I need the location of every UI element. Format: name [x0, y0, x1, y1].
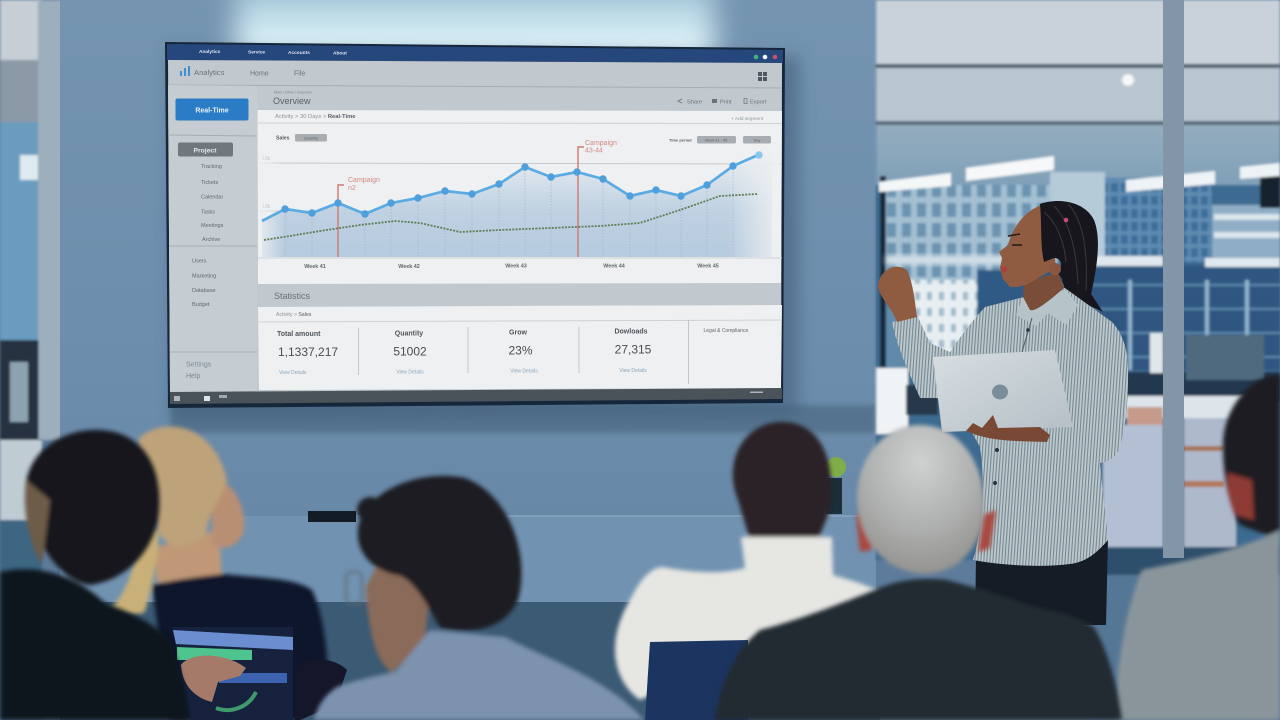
grow: Grow	[509, 330, 527, 336]
sidebar secondary menu	[192, 258, 216, 308]
nav tabs: Service	[248, 50, 265, 56]
shaded wall below the screen	[170, 405, 876, 433]
bezel	[165, 42, 785, 408]
breadcrumb and overview heading: Main / Other / Overview	[274, 90, 312, 94]
time period filter: Time period	[669, 138, 692, 142]
background: left office window	[0, 0, 42, 720]
quantity: 51002	[393, 344, 427, 358]
settings and help: Settings	[186, 362, 212, 368]
window dots	[754, 55, 777, 59]
sidebar project menu: Tasks	[201, 210, 215, 216]
sales filter: Quantity	[304, 136, 318, 140]
week labels: Week 44	[603, 264, 625, 270]
app body	[168, 60, 782, 393]
area chart: 15k	[262, 156, 271, 162]
campaign 43-44 marker: Campaign	[585, 140, 617, 147]
total amount: View Details	[279, 370, 307, 376]
home link: Home	[250, 70, 269, 78]
chair back	[645, 640, 748, 720]
audience: laptop with dashboard	[172, 627, 293, 720]
audience: grey haired man in dark suit	[714, 425, 1122, 720]
quantity: Quantity	[395, 330, 423, 338]
week labels: Week 42	[398, 264, 420, 270]
chart panel	[258, 110, 782, 284]
quantity: View Details	[396, 370, 424, 376]
analytics logo: Analytics	[194, 68, 225, 77]
office desks	[876, 333, 1280, 720]
breadcrumb row: Activity > 30 Days > Real-Time	[275, 114, 356, 120]
glass partition frame	[1163, 0, 1184, 558]
campaign n2 marker: n2	[348, 185, 356, 192]
time period filter	[669, 136, 771, 144]
breadcrumb and overview heading	[273, 90, 312, 106]
hands under laptop	[966, 415, 1050, 442]
settings and help: Help	[186, 373, 201, 380]
grow: 23%	[508, 344, 533, 358]
wall column	[38, 0, 62, 440]
campaign n2 marker	[338, 177, 380, 257]
dividers	[358, 320, 688, 384]
hair bead	[1064, 218, 1068, 222]
nav tabs: Analytics	[199, 49, 221, 55]
background: right office with city view	[876, 0, 1280, 720]
screen shadow	[170, 50, 800, 416]
laptop	[933, 350, 1073, 432]
ceiling lights	[879, 173, 951, 192]
project button	[178, 142, 233, 156]
audience: curly haired man in blue shirt	[314, 476, 644, 720]
blue wall	[60, 0, 876, 620]
project button: Project	[193, 148, 217, 154]
share print export: Share	[687, 100, 702, 106]
audience: hand on laptop	[181, 656, 246, 702]
area chart	[258, 140, 782, 258]
week labels: Week 41	[304, 264, 326, 270]
audience: man with short dark hair in white sweater	[615, 422, 880, 700]
analytics screen	[165, 42, 785, 408]
total amount	[277, 331, 338, 376]
sidebar project menu: Meetings	[201, 223, 224, 229]
breadcrumb and overview heading: Overview	[273, 96, 311, 106]
taskbar	[170, 388, 782, 404]
light glow above the screen	[235, 0, 715, 70]
grid icon	[758, 72, 767, 81]
sidebar secondary menu: Users	[192, 258, 207, 264]
downloads	[614, 328, 652, 374]
header rule	[168, 85, 782, 88]
city buildings	[880, 172, 1280, 371]
real-time button: Real-Time	[195, 108, 229, 114]
sales filter: Sales	[276, 136, 290, 142]
blue line series	[262, 155, 758, 221]
campaign n2 marker: Campaign	[348, 177, 380, 184]
audience: right man in grey jacket	[1116, 375, 1280, 720]
downloads: Dowloads	[614, 328, 648, 336]
audience: blonde woman	[107, 426, 328, 720]
title bar	[167, 44, 783, 63]
time period filter: Day	[754, 138, 760, 142]
raised hand	[878, 267, 917, 322]
dotted green series	[264, 194, 758, 240]
legal and compliance: Legal & Compliance	[704, 328, 748, 334]
sidebar project menu	[201, 164, 224, 243]
time period filter: Week 41 - 45	[705, 138, 727, 142]
sidebar background	[168, 85, 257, 393]
grow: View Details	[510, 368, 538, 374]
campaign 43-44 marker	[578, 140, 617, 257]
hair braids	[1040, 201, 1098, 300]
quantity	[393, 330, 427, 376]
sidebar project menu: Tracking	[201, 164, 222, 170]
nav tabs: Accounts	[288, 50, 310, 56]
wall panel lower section	[60, 516, 876, 603]
sidebar project menu: Calendar	[201, 194, 223, 200]
downloads: 27,315	[615, 342, 652, 356]
area chart: 10k	[262, 204, 271, 210]
pot plant	[826, 457, 846, 514]
week labels	[304, 264, 719, 270]
chair back left	[295, 660, 347, 720]
sidebar secondary menu: Marketing	[192, 274, 216, 280]
audience: woman with dark hair	[0, 430, 189, 720]
share print export	[678, 98, 767, 106]
settings and help	[186, 362, 212, 380]
statistics heading: Statistics	[274, 291, 311, 301]
share print export: Print	[720, 100, 732, 106]
sidebar project menu: Tickets	[201, 180, 218, 186]
real-time button	[176, 98, 248, 120]
grow	[508, 330, 538, 374]
share print export: Export	[750, 100, 767, 106]
sidebar project menu: Archive	[202, 237, 220, 243]
analytics logo	[180, 66, 225, 77]
facial features	[1000, 234, 1022, 274]
total amount: 1,1337,217	[278, 345, 338, 359]
nav tabs	[199, 49, 347, 56]
statistics panel	[258, 305, 782, 390]
chart panel: + Add segment	[731, 116, 764, 122]
floor and skirting	[60, 602, 880, 720]
legs	[975, 538, 1108, 625]
striped shirt	[892, 288, 1128, 566]
nav tabs: About	[333, 50, 347, 56]
sidebar secondary menu: Budget	[192, 302, 210, 308]
forearm sleeve	[1055, 420, 1122, 460]
total amount: Total amount	[277, 331, 321, 338]
neck	[1023, 272, 1064, 310]
sales filter	[276, 134, 327, 142]
sidebar secondary menu: Database	[192, 288, 216, 294]
file link: File	[294, 70, 305, 78]
ear	[1049, 263, 1061, 275]
collar and placket	[993, 290, 1078, 485]
wall bracket	[308, 511, 356, 522]
week labels: Week 45	[697, 264, 719, 270]
campaign 43-44 marker: 43-44	[585, 148, 603, 154]
statistics panel: Activity > Sales	[276, 312, 312, 318]
face	[999, 205, 1056, 287]
week labels: Week 43	[505, 264, 527, 270]
downloads: View Details	[619, 368, 647, 374]
braid down the back	[1062, 280, 1103, 312]
presenter	[878, 201, 1128, 625]
